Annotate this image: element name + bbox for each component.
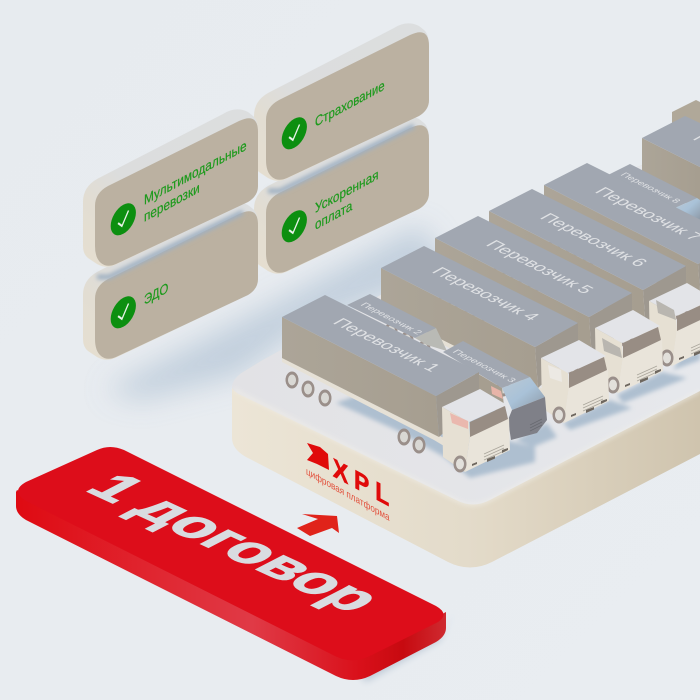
arrow [297,514,339,536]
cab window [548,365,562,382]
plate shadow [360,608,456,682]
red plate: 1 договор [16,447,446,680]
text: Мультимодальные перевозки: Мультимодальные [144,136,247,208]
truck: Перевозчик 8: Перевозчик 8 [618,171,683,204]
card: Ускоренная оплата [254,116,429,274]
card shadow on ЭДО [97,212,243,277]
truck: Перевозчик 5: Перевозчик 5 [481,238,598,296]
logo: XPL [306,443,395,524]
side window [450,413,468,429]
truck: Перевозчик 3 [443,341,547,440]
text: ЭДО: ЭДО [144,279,168,308]
text: Ускоренная оплата: оплата [315,197,353,233]
icon: check [282,112,307,155]
card: Страхование [254,23,429,181]
truck: Перевозчик 6 [489,189,700,366]
logo caption: цифровая платформа [306,465,390,524]
icon: check [111,198,136,241]
card: Мультимодальные перевозки [83,109,258,267]
text: Мультимодальные перевозки: перевозки [144,179,200,225]
truck: Перевозчик 1: Перевозчик 1 [328,316,445,374]
cab window [656,300,676,320]
truck: Перевозчик 9 [642,100,700,210]
truck: Перевозчик 4 [381,246,609,424]
cab window [602,338,622,358]
icon: red chevrons [307,443,329,470]
truck: Перевозчик 1 [282,295,510,472]
card: ЭДО [83,202,258,360]
icon: check [282,205,307,248]
truck: Перевозчик 6: Перевозчик 6 [535,211,652,269]
truck: Перевозчик 3: Перевозчик 3 [450,348,519,384]
card shadow on Ускоренная [268,126,414,191]
truck: Перевозчик 7 [544,163,700,340]
truck: Перевозчик 2 [347,294,447,351]
truck: Перевозчик 5 [435,216,663,394]
truck: Перевозчик 7: Перевозчик 7 [590,185,700,243]
icon: check [111,291,136,334]
truck: Перевозчик 4: Перевозчик 4 [427,265,544,323]
logo: XPL: XPL [333,454,395,516]
text: Страхование: Страхование [315,76,385,130]
text: Ускоренная оплата: Ускоренная [315,166,379,216]
truck: Перевозчик 2: Перевозчик 2 [358,301,425,336]
truck: Перевозчик 8 [608,164,700,220]
plate side [16,490,446,680]
plate top [18,447,444,660]
shadows of trucks on the platform [336,352,700,478]
platform base [232,135,700,568]
plate text: 1 договор [72,466,398,619]
shadow of the cards on the floor [105,225,450,400]
